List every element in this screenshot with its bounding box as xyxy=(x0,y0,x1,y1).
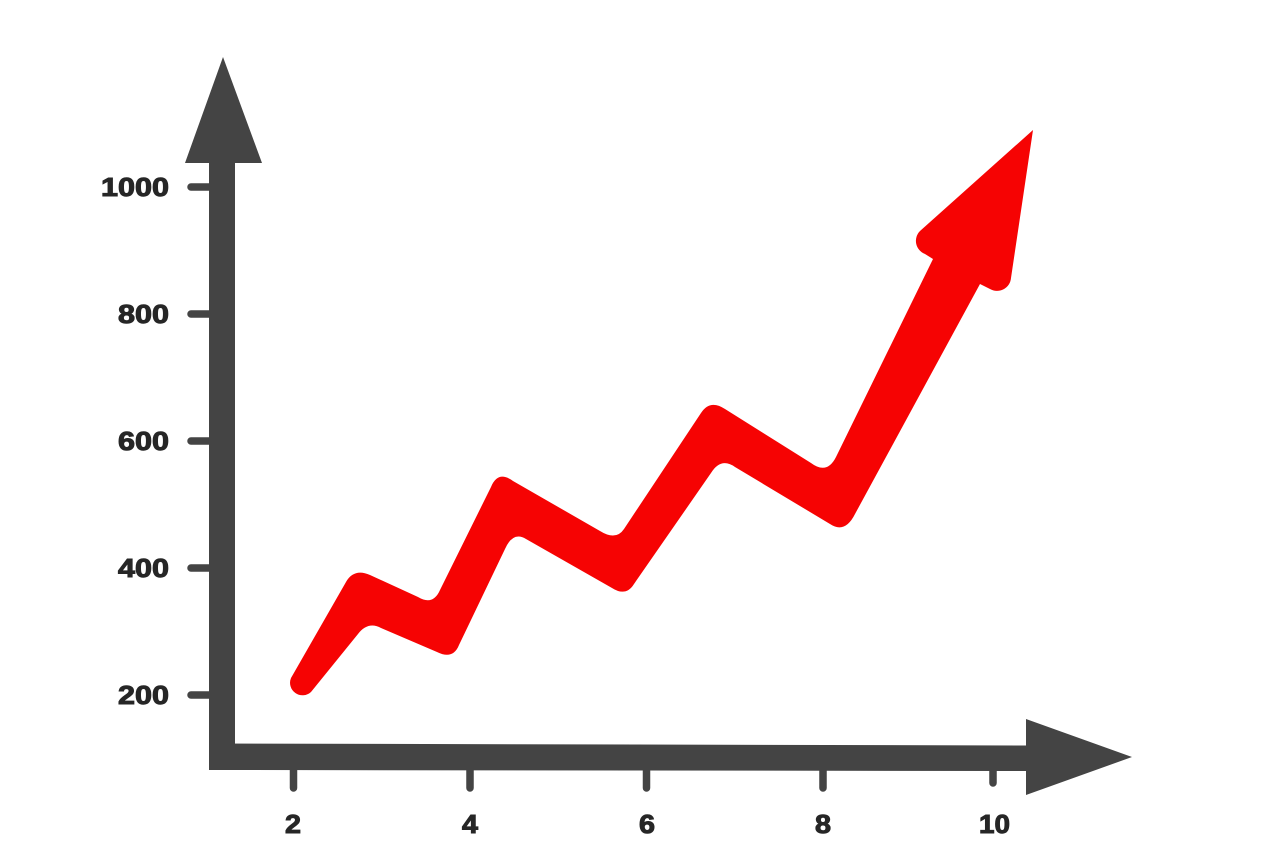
x axis labels: 2 xyxy=(285,809,301,839)
x axis arrow xyxy=(209,719,1132,795)
y axis ticks xyxy=(191,187,212,695)
y axis labels: 200 xyxy=(118,680,169,710)
x axis labels: 10 xyxy=(979,809,1010,839)
y axis labels: 400 xyxy=(118,553,169,583)
y axis arrow xyxy=(185,57,262,770)
x axis labels: 6 xyxy=(639,809,655,839)
x axis labels: 8 xyxy=(815,809,831,839)
x axis ticks xyxy=(294,765,993,788)
y axis labels: 1000 xyxy=(101,172,169,202)
y axis labels xyxy=(101,172,169,710)
y axis labels: 600 xyxy=(118,426,169,456)
x axis labels: 4 xyxy=(462,809,479,839)
y axis labels: 800 xyxy=(118,299,169,329)
x axis labels xyxy=(285,809,1010,839)
red trend arrow xyxy=(290,130,1033,695)
